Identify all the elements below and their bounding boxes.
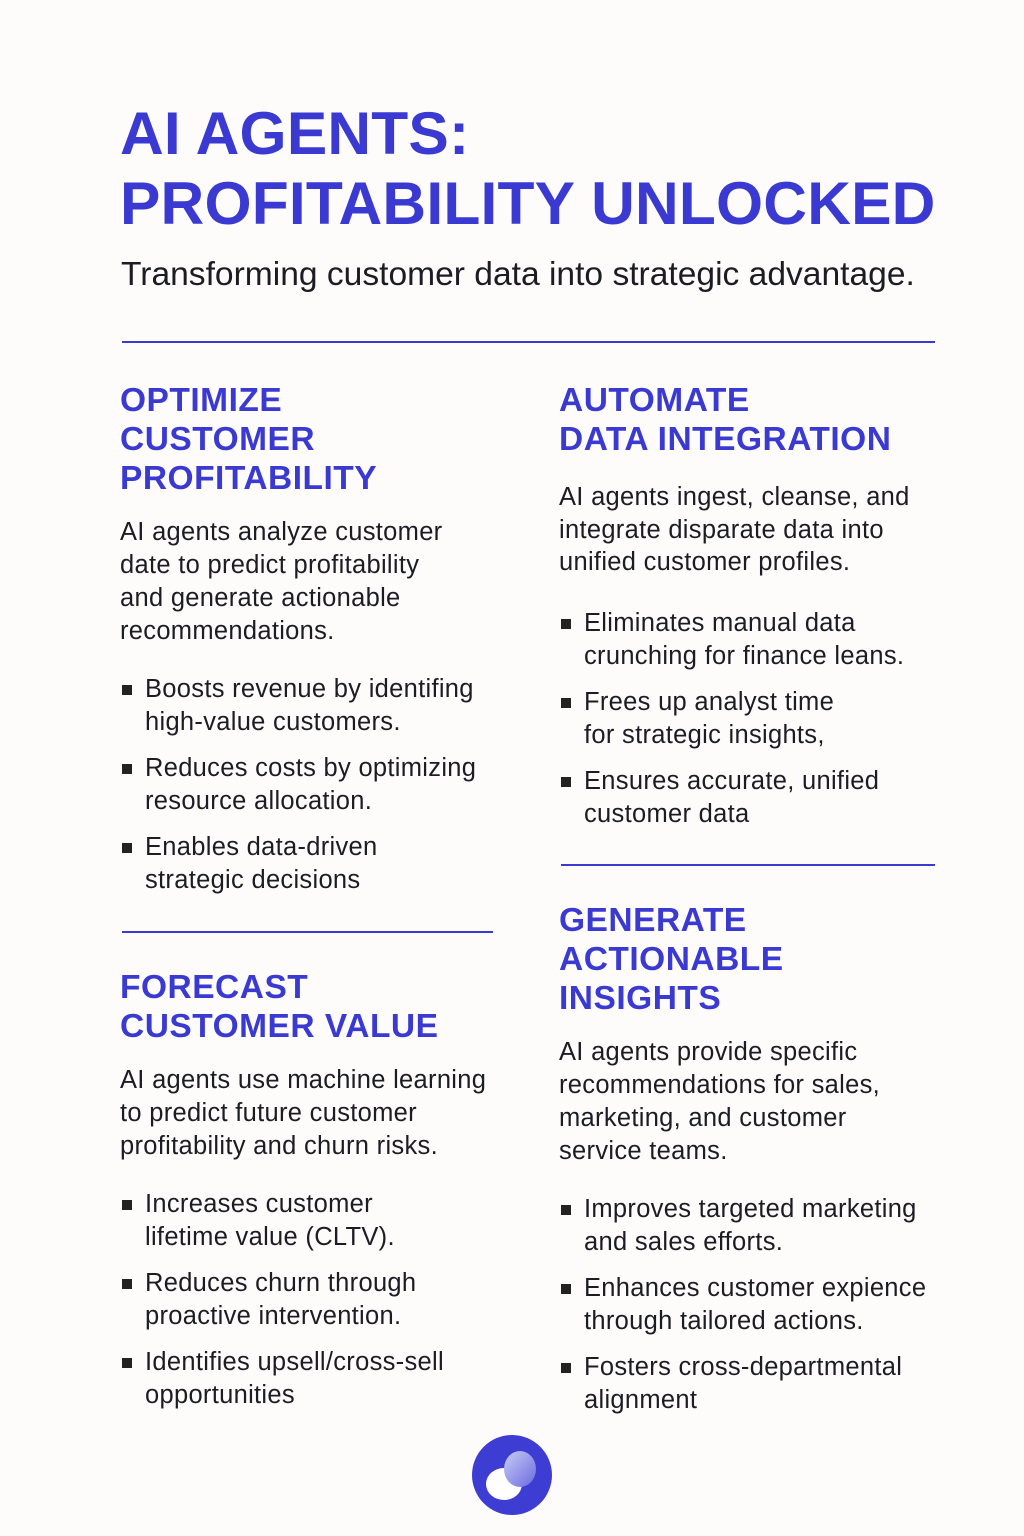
bullet list: proactive intervention. (145, 1302, 401, 1330)
heading: OPTIMIZE (120, 382, 282, 419)
bullet list: Reduces costs by optimizing (145, 754, 476, 782)
text block (559, 1038, 880, 1165)
bullet list: Boosts revenue by identifing (145, 675, 474, 703)
panel: optimize customer profitability (120, 382, 476, 894)
bullet list: Enhances customer expience (584, 1274, 926, 1302)
bullet list (561, 608, 904, 828)
text block: recommendations. (120, 617, 335, 645)
heading: FORECAST (120, 969, 308, 1006)
heading: CUSTOMER (120, 421, 315, 458)
text block: marketing, and customer (559, 1104, 847, 1132)
heading (120, 382, 377, 497)
bullet list: lifetime value (CLTV). (145, 1223, 395, 1251)
bullet list: high-value customers. (145, 708, 401, 736)
bullet list: Eliminates manual data (584, 608, 856, 636)
panel: generate actionable insights (559, 902, 926, 1414)
bullet list: through tailored actions. (584, 1307, 864, 1335)
bullet list: customer data (584, 800, 749, 828)
text block: and generate actionable (120, 584, 401, 612)
heading: ACTIONABLE (559, 941, 784, 978)
text block: unified customer profiles. (559, 548, 850, 576)
heading: GENERATE (559, 902, 747, 939)
heading (559, 382, 891, 458)
bullet list: opportunities (145, 1381, 295, 1409)
title (120, 99, 936, 237)
bullet list (561, 1195, 926, 1414)
text block: AI agents use machine learning (120, 1066, 486, 1094)
bullet list: Ensures accurate, unified (584, 766, 879, 794)
heading: INSIGHTS (559, 980, 721, 1017)
bullet list: alignment (584, 1386, 697, 1414)
subtitle: Transforming customer data into strategic advantage. (121, 256, 915, 293)
text block: date to predict profitability (120, 551, 419, 579)
text block: AI agents ingest, cleanse, and (559, 483, 910, 511)
heading: DATA INTEGRATION (559, 421, 891, 458)
heading: AUTOMATE (559, 382, 750, 419)
heading (120, 969, 438, 1045)
text block: service teams. (559, 1137, 728, 1165)
bullet list: crunching for finance leans. (584, 642, 904, 670)
bullet list: Enables data-driven (145, 833, 378, 861)
bullet list: Improves targeted marketing (584, 1195, 917, 1223)
text block: recommendations for sales, (559, 1071, 880, 1099)
panel: forecast customer value (120, 969, 486, 1409)
text block (559, 483, 910, 576)
bullet list: Frees up analyst time (584, 688, 834, 716)
bullet list: resource allocation. (145, 787, 372, 815)
bullet list: strategic decisions (145, 866, 360, 894)
bullet list (122, 675, 476, 894)
text block: integrate disparate data into (559, 516, 884, 544)
panel: automate data integration (559, 382, 910, 828)
text block (120, 518, 442, 645)
title: AI AGENTS: (120, 99, 469, 167)
bullet list: for strategic insights, (584, 720, 825, 748)
bullet list: Identifies upsell/cross-sell (145, 1348, 444, 1376)
bullet list: Increases customer (145, 1190, 373, 1218)
text block: AI agents analyze customer (120, 518, 442, 546)
bullet list: and sales efforts. (584, 1228, 783, 1256)
icon: logo (472, 1435, 552, 1515)
heading (559, 902, 784, 1017)
text block: to predict future customer (120, 1099, 417, 1127)
title: PROFITABILITY UNLOCKED (120, 169, 936, 237)
text block: AI agents provide specific (559, 1038, 857, 1066)
bullet list: Fosters cross-departmental (584, 1353, 902, 1381)
bullet list (122, 1190, 444, 1409)
heading: PROFITABILITY (120, 460, 377, 497)
heading: CUSTOMER VALUE (120, 1008, 438, 1045)
text block (120, 1066, 486, 1160)
bullet list: Reduces churn through (145, 1269, 416, 1297)
text block: profitability and churn risks. (120, 1132, 438, 1160)
